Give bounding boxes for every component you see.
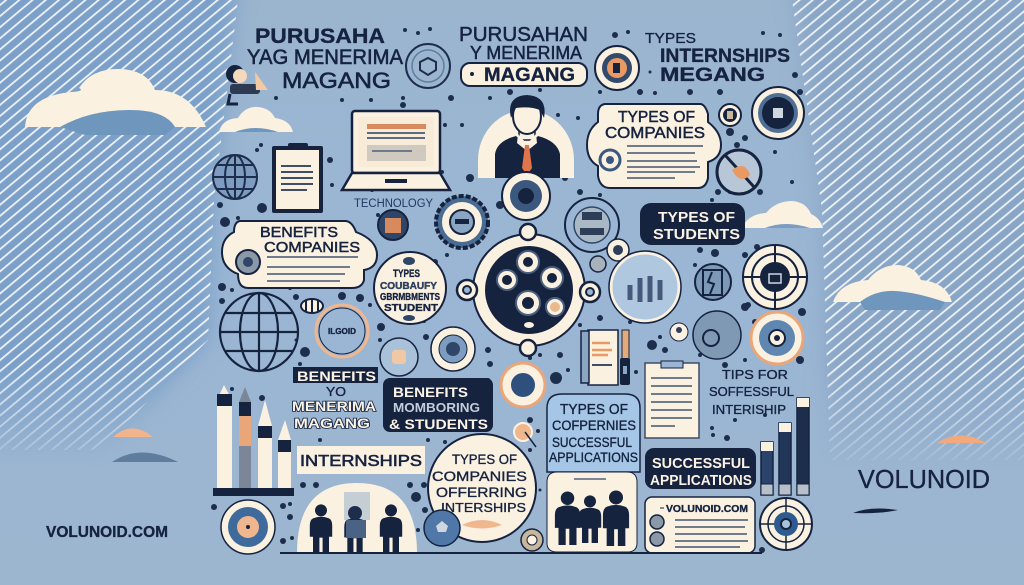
icon: prohibited sign: [717, 150, 761, 194]
panel: benefits yang menerima magang: YO: [326, 384, 346, 399]
cloud right: [833, 265, 952, 310]
panel: types of companies offering internships: [428, 434, 536, 542]
panel: types of companies: TYPES OF: [618, 109, 695, 126]
text block: tips: SOFFESSFUL: [709, 385, 794, 399]
title block left: [247, 25, 403, 93]
brand right: VOLUNOID: [858, 464, 990, 494]
panel: benefits yang menerima magang: BENEFITS: [297, 368, 376, 384]
title block left: MAGANG: [282, 68, 391, 93]
cloud beside students: [742, 201, 823, 228]
pill: benefits mentoring students: MOMBORING: [393, 400, 480, 415]
text block: tips: [709, 367, 794, 417]
icon: orange ring: [595, 46, 639, 90]
scattered dots: [211, 27, 806, 553]
title block right: TYPES: [645, 30, 696, 47]
banner: internships: [297, 446, 425, 474]
laptop: [342, 111, 450, 190]
background hatch right: [792, 0, 1024, 470]
panel: benefits yang menerima magang: MAGANG: [294, 415, 370, 431]
title block right: INTERNSHIPS: [660, 46, 790, 67]
pill: benefits mentoring students: BENEFITS: [393, 384, 468, 400]
panel: types circle: [374, 252, 446, 324]
title block centre: [459, 24, 588, 86]
pill: benefits mentoring students: & STUDENTS: [389, 416, 488, 432]
background hatch left: [0, 0, 238, 460]
diagram: central hub: [457, 224, 600, 356]
panel: benefits yang menerima magang: [292, 367, 378, 431]
panel: people group: [547, 472, 637, 552]
title block centre: Y MENERIMA: [470, 43, 582, 63]
icon: bottom left dial: [221, 500, 275, 554]
icon: bottom target: [760, 498, 812, 550]
clipboard: [272, 143, 323, 213]
panel: benefits companies: BENEFITS: [260, 224, 338, 241]
icon: pale circle: [380, 338, 418, 376]
icon: gear ring: [436, 196, 488, 248]
panel: types of successful applications: APPLICATIONS: [549, 450, 638, 465]
panel: types of successful applications: [547, 394, 640, 472]
chart: pale circle: [609, 251, 681, 323]
panel: types of successful applications: COFPERNIES: [552, 418, 636, 433]
panel: types circle: COUBAUFY: [380, 281, 437, 292]
title block right: MEGANG: [660, 65, 765, 86]
icon: gray gauge: [693, 311, 741, 359]
icon: face circle: [565, 198, 619, 252]
illustration: three people dome: [297, 483, 417, 553]
panel: benefits companies: COMPANIES: [264, 239, 360, 256]
icon: tan ring: [521, 529, 543, 551]
panel: benefits companies: [222, 221, 377, 288]
title block left: YAG MENERIMA: [247, 46, 403, 69]
cloud left large: [25, 69, 206, 135]
hills decoration: [112, 428, 986, 513]
icon: navy circle top right: [752, 87, 804, 139]
icon: large globe: [220, 293, 298, 371]
panel: types of companies: COMPANIES: [605, 125, 705, 142]
pen: [620, 330, 630, 385]
icon: target circle: [431, 327, 475, 371]
illustration: businessman: [478, 95, 574, 178]
icon: small globe: [213, 155, 257, 199]
panel: types circle: GBRMBMENTS: [380, 292, 440, 303]
icon: crosshair target: [743, 245, 807, 309]
hub connector nodes: [457, 224, 600, 356]
cloud small upper left: [219, 107, 293, 132]
document with orange lines: [581, 330, 618, 385]
panel: types of companies offering internships: OFFERRING: [436, 484, 527, 500]
pill: benefits mentoring students: [383, 378, 493, 432]
pill: successful applications: APPLICATIONS: [650, 472, 752, 489]
bar chart: [761, 398, 809, 495]
brand left: VOLUNOID.COM: [46, 524, 168, 541]
panel: types of companies offering internships: TYPES OF: [452, 451, 517, 467]
circle under businessman: [502, 172, 550, 220]
panel: types of successful applications: TYPES OF: [560, 402, 628, 418]
panel: types circle: TYPES: [393, 268, 420, 280]
pill: types of students: TYPES OF: [658, 209, 735, 226]
label: technology: TECHNOLOGY: [354, 198, 433, 210]
icon: small orange dot ring: [378, 210, 408, 240]
icon: orange spiral ring: [751, 312, 803, 364]
panel: volunoid.com: [645, 497, 755, 553]
panel: benefits yang menerima magang: MENERIMA: [292, 398, 376, 414]
text block: tips: INTERISHIP: [712, 403, 786, 417]
pencils chart: [213, 385, 294, 496]
pill: magang: MAGANG: [484, 65, 575, 86]
pill: types of students: [640, 203, 745, 245]
icon: person at desk: [226, 65, 268, 104]
title block right: [645, 30, 790, 86]
icon: blue circle: [424, 510, 460, 546]
pill: successful applications: [645, 448, 756, 489]
icon: small orange dot: [514, 423, 536, 447]
icon: orange ring lower: [501, 363, 545, 407]
icon: gray dot: [590, 256, 606, 272]
banner: internships: INTERNSHIPS: [300, 453, 422, 470]
icon: small cream dot: [607, 239, 629, 261]
icon: badge ring: [406, 44, 450, 88]
icon: small person dot: [670, 323, 688, 341]
icon: small capsule: [301, 299, 323, 313]
title block centre: PURUSAHAN: [459, 24, 588, 46]
icon: orange ring legend: ILGOID: [328, 327, 356, 336]
text block: tips: TIPS FOR: [722, 367, 788, 382]
base line: [280, 552, 762, 554]
pill: types of students: STUDENTS: [653, 226, 740, 243]
panel: types circle: STUDENT: [384, 303, 438, 314]
icon: orange ring legend: [316, 305, 368, 357]
panel: types of companies offering internships: INTERSHIPS: [441, 500, 526, 515]
icon: lightning square: [695, 264, 731, 300]
icon: small ring: [719, 104, 741, 126]
panel: volunoid.com: VOLUNOID.COM: [666, 504, 748, 515]
panel: types of companies: [587, 104, 721, 188]
pill: successful applications: SUCCESSFUL: [652, 455, 750, 472]
panel: types of companies offering internships: COMPANIES: [432, 468, 527, 484]
panel: types of successful applications: SUCCESSFUL: [552, 435, 632, 450]
title block left: PURUSAHA: [255, 25, 385, 48]
paper document: [645, 361, 699, 438]
